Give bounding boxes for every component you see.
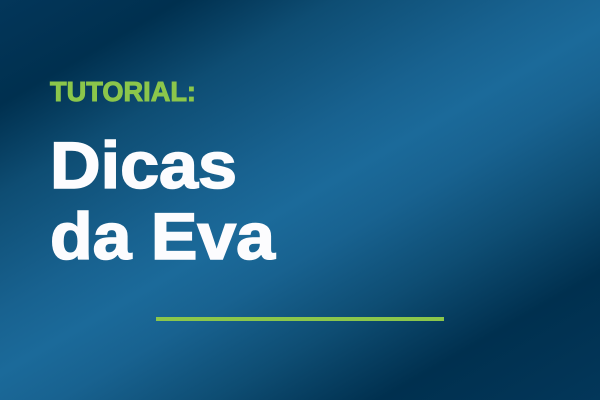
title line 2: da Eva: da Eva bbox=[50, 199, 276, 273]
title line 1: Dicas: Dicas bbox=[50, 128, 237, 202]
label: TUTORIAL: TUTORIAL: bbox=[50, 76, 196, 107]
green accent line bbox=[156, 317, 444, 321]
